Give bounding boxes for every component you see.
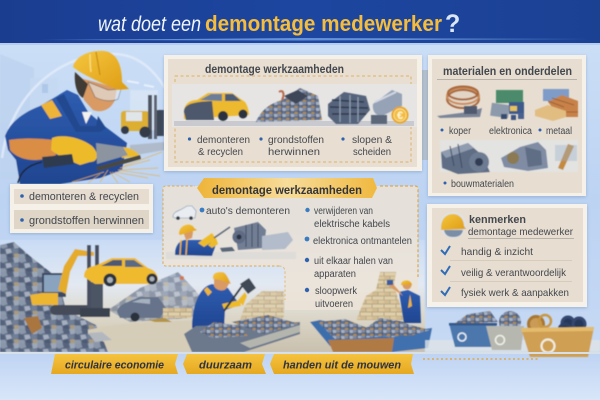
icon: hard hat badge <box>440 212 466 238</box>
text: koper: koper <box>449 126 472 137</box>
body <box>5 90 127 184</box>
illustration: worker with grinder <box>0 51 165 184</box>
title: ? <box>445 10 460 38</box>
head <box>80 78 117 111</box>
yellow car <box>84 258 158 286</box>
text: metaal <box>538 126 572 137</box>
middle scrap heap <box>108 272 208 322</box>
text: grondstoffen herwinnen: grondstoffen <box>268 134 324 146</box>
panel: dashed task box <box>163 178 418 310</box>
icon: metal stack <box>535 89 578 121</box>
text: uit elkaar halen van apparaten: apparaten <box>314 269 356 280</box>
item: veilig & verantwoordelijk: veilig & verantwoordelijk <box>461 267 567 279</box>
left scrap heap <box>0 242 108 352</box>
scrap skips <box>310 319 432 352</box>
title: wat doet een <box>98 13 201 36</box>
panel: materialen en onderdelen <box>428 55 586 196</box>
second worker <box>387 280 421 323</box>
icon: copper coil <box>437 86 482 118</box>
grey bin <box>486 311 524 350</box>
illustration: scrap yard <box>0 240 432 352</box>
text: elektronica ontmantelen: elektronica ontmantelen <box>313 236 412 247</box>
text: elektronica: elektronica <box>489 126 532 137</box>
text: grondstoffen herwinnen: herwinnen <box>268 146 320 158</box>
text: auto's demonteren: auto's demonteren <box>206 206 290 217</box>
item: handig & inzicht: handig & inzicht <box>461 246 533 258</box>
panel: demontage werkzaamheden <box>164 55 422 171</box>
heading: kenmerken <box>469 214 526 226</box>
panel: left list <box>10 184 153 233</box>
title: demontage medewerker <box>205 11 442 36</box>
ribbon: circulaire economie: circulaire economie <box>65 360 164 372</box>
text: demonteren & recyclen: demonteren <box>197 134 250 146</box>
heading: materialen en onderdelen <box>443 66 572 78</box>
text: slopen & scheiden: scheiden <box>353 146 391 158</box>
text: uit elkaar halen van apparaten <box>305 256 393 280</box>
foreground rubble <box>0 303 108 352</box>
text: slopen & scheiden <box>341 134 392 158</box>
worker with hammer <box>192 272 256 330</box>
text: grondstoffen herwinnen: grondstoffen herwinnen <box>29 215 144 227</box>
sparks <box>72 152 162 183</box>
banner: demontage werkzaamheden <box>212 183 362 197</box>
icon: euro coin: € <box>397 110 403 122</box>
text: sloopwerk uitvoeren: uitvoeren <box>315 299 353 310</box>
text: sloopwerk uitvoeren: sloopwerk <box>315 286 358 297</box>
hard hat <box>73 51 129 90</box>
banner <box>197 178 377 198</box>
grinder <box>42 154 74 168</box>
heading: demontage werkzaamheden <box>205 64 344 76</box>
blue bin <box>449 311 498 347</box>
grey wrecked car <box>117 297 172 322</box>
text: grondstoffen herwinnen <box>259 134 324 158</box>
text: metaal: metaal <box>546 126 572 137</box>
ribbon: handen uit de mouwen <box>270 354 414 374</box>
ground <box>88 320 200 352</box>
ribbon: circulaire economie <box>51 354 178 374</box>
text: uit elkaar halen van apparaten: uit elkaar halen van <box>314 256 393 267</box>
small car icon <box>173 206 196 220</box>
illustration: mechanic with motor <box>166 222 296 259</box>
gold bin <box>521 315 594 357</box>
text: koper <box>440 126 472 137</box>
excavator <box>30 245 110 317</box>
text: slopen & scheiden: slopen & <box>352 134 392 146</box>
text: sloopwerk uitvoeren <box>305 286 358 310</box>
brick wall <box>357 272 406 320</box>
arm <box>9 138 56 160</box>
workbench <box>184 315 300 352</box>
panel: kenmerken: demontage medewerker <box>468 226 573 238</box>
icon: motors and parts <box>440 140 578 174</box>
header banner <box>0 0 600 45</box>
white ground edge <box>0 352 600 354</box>
forklift <box>121 95 164 139</box>
text: demonteren & recyclen: & recyclen <box>198 146 243 158</box>
item: fysiek werk & aanpakken: fysiek werk & aanpakken <box>461 287 569 299</box>
text: demonteren & recyclen <box>188 134 250 158</box>
panel: kenmerken <box>427 204 587 307</box>
stacked blocks <box>163 308 192 318</box>
icon: electronics <box>490 90 524 120</box>
image strip: car and materials <box>184 88 408 124</box>
title <box>98 10 460 38</box>
scrap on brick wall skip <box>366 318 416 338</box>
ribbon: duurzaam <box>183 354 266 374</box>
text: demonteren & recyclen: demonteren & recyclen <box>29 191 139 203</box>
ribbon: duurzaam: duurzaam <box>199 360 252 372</box>
recycling bins <box>425 311 600 357</box>
text: bouwmaterialen: bouwmaterialen <box>451 179 514 190</box>
text: verwijderen van elektrische kabels: verwijderen van <box>314 206 373 217</box>
text: verwijderen van elektrische kabels: elektrische kabels <box>314 219 390 230</box>
factory background <box>0 54 165 180</box>
ribbon: handen uit de mouwen: handen uit de mouwen <box>283 360 401 372</box>
icon: euro coin <box>392 106 408 124</box>
glove <box>51 136 97 165</box>
text: verwijderen van elektrische kabels <box>305 206 390 230</box>
